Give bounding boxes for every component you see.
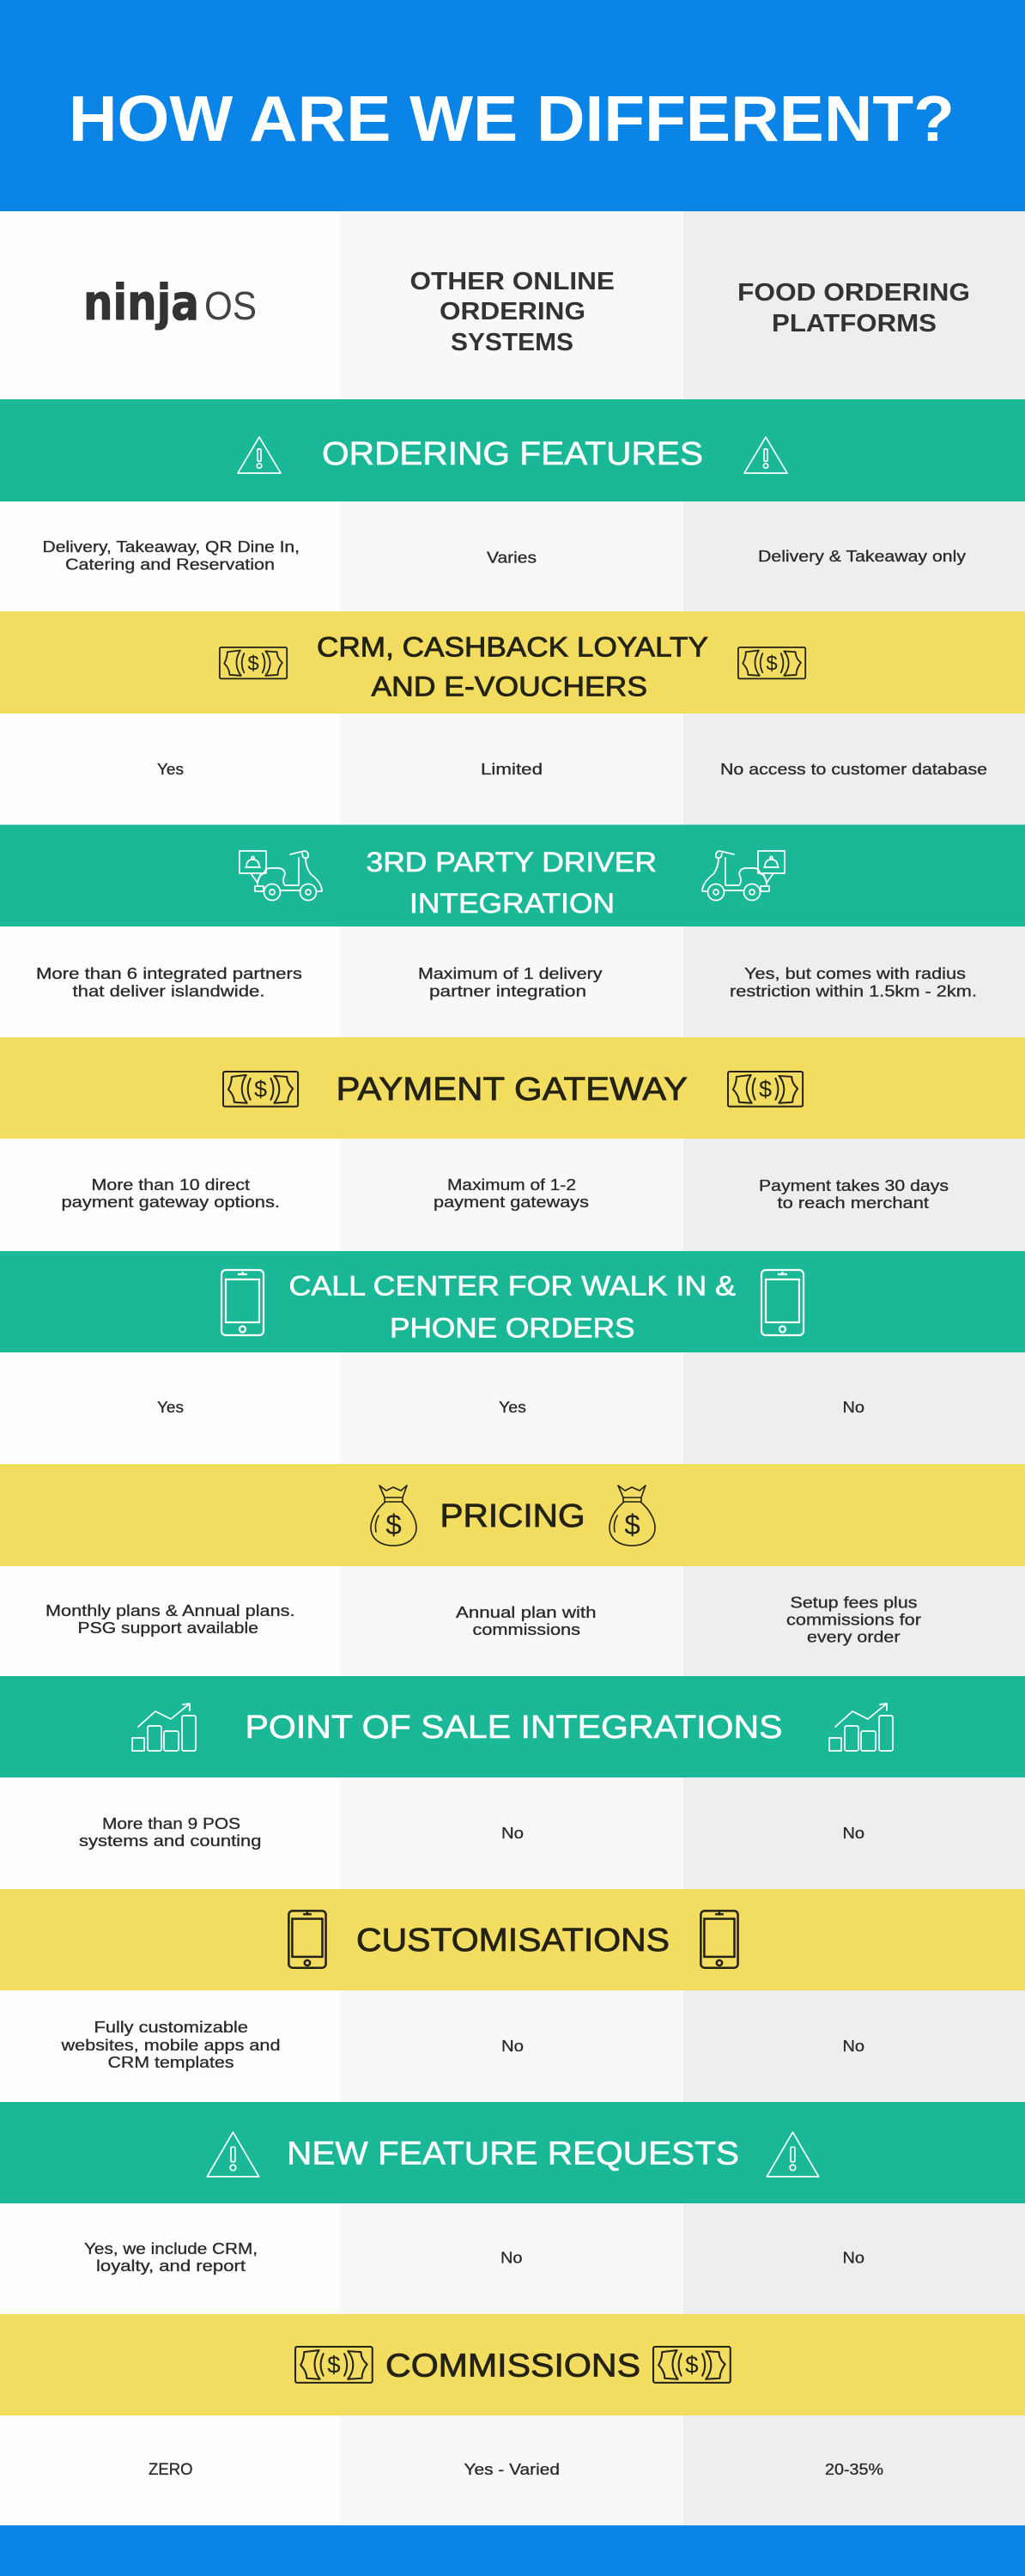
band: new feature requests xyxy=(0,2102,1025,2203)
cell: other systems: Annual plan with xyxy=(456,1604,596,1621)
column heading: other online ordering systems: ORDERING xyxy=(440,298,585,325)
cell: other systems: Limited xyxy=(481,761,543,778)
icon: banknote right: $ xyxy=(685,2352,699,2379)
heading xyxy=(317,632,708,702)
heading: CRM, CASHBACK LOYALTY xyxy=(317,632,708,663)
icon: phone left xyxy=(221,1270,264,1335)
title: HOW ARE WE DIFFERENT? xyxy=(69,82,955,155)
cell: other systems: payment gateways xyxy=(434,1194,589,1211)
cell: ninjaos: CRM templates xyxy=(108,2054,234,2071)
heading: INTEGRATION xyxy=(409,888,615,919)
band: pricing xyxy=(0,1464,1025,1566)
icon: banknote right: $ xyxy=(766,653,778,676)
cell: other systems: Yes - Varied xyxy=(464,2461,560,2478)
cell: other systems: partner integration xyxy=(429,982,586,999)
band: call center xyxy=(0,1251,1025,1352)
icon: phone right xyxy=(761,1270,804,1335)
heading xyxy=(366,847,657,919)
header banner xyxy=(0,0,1025,211)
cell: other systems: Maximum of 1 delivery xyxy=(418,965,603,982)
cell: ninjaos: that deliver islandwide. xyxy=(72,982,264,999)
cell: other systems xyxy=(434,1176,589,1211)
cell: food platforms: No xyxy=(843,1825,864,1842)
row: new feature requests xyxy=(0,2203,1025,2314)
cell: food platforms: every order xyxy=(807,1629,900,1646)
logo: ninjaOS: OS xyxy=(204,283,257,328)
band: crm, cashback loyalty and e-vouchers xyxy=(0,611,1025,714)
column heading: food ordering platforms: FOOD ORDERING xyxy=(737,279,970,307)
cell: ninjaos: systems and counting xyxy=(79,1832,261,1850)
icon: banknote left: $ xyxy=(327,2352,341,2379)
column heading: other online ordering systems: OTHER ONLINE xyxy=(410,268,615,295)
cell: other systems: No xyxy=(501,2038,524,2055)
heading: POINT OF SALE INTEGRATIONS xyxy=(246,1710,783,1746)
footer bar xyxy=(0,2525,1025,2576)
cell: food platforms: No access to customer database xyxy=(720,761,987,778)
icon: growth chart left xyxy=(132,1704,196,1751)
cell: food platforms xyxy=(786,1595,921,1646)
icon: growth chart right xyxy=(829,1704,893,1751)
cell: ninjaos: ZERO xyxy=(149,2461,192,2479)
icon: banknote left: $ xyxy=(254,1077,267,1103)
icon: banknote left xyxy=(295,2347,373,2383)
icon: banknote right: $ xyxy=(759,1077,772,1103)
cell: other systems: No xyxy=(501,1825,524,1842)
band: payment gateway xyxy=(0,1037,1025,1139)
cell: food platforms xyxy=(730,965,977,999)
cell: other systems xyxy=(456,1604,596,1638)
cell: ninjaos xyxy=(43,538,300,574)
heading: CALL CENTER FOR WALK IN & xyxy=(288,1271,736,1302)
cell: other systems xyxy=(418,965,603,999)
cell: ninjaos xyxy=(62,1176,280,1211)
cell: other systems: Maximum of 1-2 xyxy=(447,1176,576,1194)
row: commissions xyxy=(0,2415,1025,2525)
cell: food platforms: Delivery & Takeaway only xyxy=(758,548,966,565)
cell: ninjaos: Yes xyxy=(157,1399,184,1416)
cell: other systems: Yes xyxy=(499,1399,526,1416)
band: 3rd party driver integration xyxy=(0,824,1025,927)
cell: other systems: No xyxy=(500,2250,522,2267)
icon: banknote left: $ xyxy=(247,653,259,676)
cell: ninjaos: Catering and Reservation xyxy=(65,556,275,574)
cell: other systems: commissions xyxy=(472,1621,580,1638)
heading: COMMISSIONS xyxy=(385,2348,640,2385)
cell: food platforms xyxy=(759,1177,949,1212)
row: pricing xyxy=(0,1566,1025,1676)
heading: PRICING xyxy=(440,1498,585,1534)
row: payment gateway xyxy=(0,1139,1025,1251)
row: crm xyxy=(0,714,1025,824)
icon: warning triangle left xyxy=(238,437,281,473)
cell: ninjaos: PSG support available xyxy=(77,1619,258,1637)
icon: banknote left xyxy=(223,1072,298,1107)
icon: phone right xyxy=(701,1911,738,1968)
icon: money bag right: $ xyxy=(624,1509,640,1540)
icon: delivery scooter left xyxy=(240,851,322,900)
row: point of sale xyxy=(0,1777,1025,1889)
icon: phone left xyxy=(288,1911,326,1968)
heading: CUSTOMISATIONS xyxy=(356,1923,670,1959)
cell: ninjaos xyxy=(36,965,302,999)
cell: ninjaos: Monthly plans & Annual plans. xyxy=(45,1602,295,1619)
heading: ORDERING FEATURES xyxy=(322,436,703,472)
cell: food platforms: 20-35% xyxy=(825,2461,883,2478)
cell: food platforms: No xyxy=(843,2250,864,2267)
column heading: food ordering platforms xyxy=(737,279,970,337)
cell: ninjaos xyxy=(84,2240,258,2275)
cell: ninjaos: Fully customizable xyxy=(94,2019,248,2036)
cell: ninjaos: Yes xyxy=(157,761,184,778)
cell: food platforms: restriction within 1.5km - 2km. xyxy=(730,982,977,999)
icon: banknote right xyxy=(653,2347,731,2383)
cell: ninjaos xyxy=(60,2019,280,2071)
cell: food platforms: No xyxy=(843,2038,864,2055)
cell: food platforms: Yes, but comes with radius xyxy=(744,965,966,982)
cell: ninjaos: Delivery, Takeaway, QR Dine In, xyxy=(43,538,300,556)
icon: money bag left: $ xyxy=(385,1509,402,1540)
cell: ninjaos: Yes, we include CRM, xyxy=(84,2240,258,2257)
row: driver integration xyxy=(0,927,1025,1037)
column heading: food ordering platforms: PLATFORMS xyxy=(772,310,937,337)
cell: ninjaos xyxy=(79,1815,261,1850)
cell: food platforms: No xyxy=(843,1399,864,1416)
heading: AND E-VOUCHERS xyxy=(371,671,647,702)
icon: warning triangle right xyxy=(744,437,787,473)
cell: ninjaos: loyalty, and report xyxy=(96,2257,246,2275)
column heading: other online ordering systems xyxy=(410,268,615,356)
cell: ninjaos: websites, mobile apps and xyxy=(60,2037,280,2054)
icon: banknote right xyxy=(738,647,805,678)
cell: other systems: Varies xyxy=(487,550,537,567)
icon: warning triangle left xyxy=(207,2132,259,2177)
cell: ninjaos: More than 9 POS xyxy=(102,1815,240,1832)
icon: delivery scooter right xyxy=(702,851,785,900)
cell: ninjaos xyxy=(45,1602,295,1637)
icon: warning triangle right xyxy=(767,2132,819,2177)
column heading: other online ordering systems: SYSTEMS xyxy=(451,329,573,356)
icon: money bag left xyxy=(371,1485,416,1546)
heading: PHONE ORDERS xyxy=(390,1313,635,1344)
heading: PAYMENT GATEWAY xyxy=(337,1072,688,1108)
cell: food platforms: commissions for xyxy=(786,1612,921,1629)
heading xyxy=(288,1271,736,1344)
band: point of sale integrations xyxy=(0,1676,1025,1777)
heading: 3RD PARTY DRIVER xyxy=(366,847,657,878)
cell: ninjaos: payment gateway options. xyxy=(62,1194,280,1211)
cell: food platforms: Setup fees plus xyxy=(790,1595,917,1612)
cell: food platforms: Payment takes 30 days xyxy=(759,1177,949,1194)
band: commissions xyxy=(0,2314,1025,2415)
column headers xyxy=(0,211,1025,399)
icon: banknote right xyxy=(728,1072,803,1107)
row: call center xyxy=(0,1352,1025,1464)
band: ordering features xyxy=(0,399,1025,501)
icon: banknote left xyxy=(220,647,287,678)
cell: ninjaos: More than 6 integrated partners xyxy=(36,965,302,982)
band: customisations xyxy=(0,1889,1025,1990)
row: ordering features xyxy=(0,501,1025,611)
logo: ninjaOS: ninja xyxy=(83,275,199,331)
cell: food platforms: to reach merchant xyxy=(778,1194,929,1212)
row: customisations xyxy=(0,1990,1025,2102)
icon: money bag right xyxy=(610,1485,655,1546)
heading: NEW FEATURE REQUESTS xyxy=(287,2136,739,2172)
cell: ninjaos: More than 10 direct xyxy=(91,1176,250,1194)
